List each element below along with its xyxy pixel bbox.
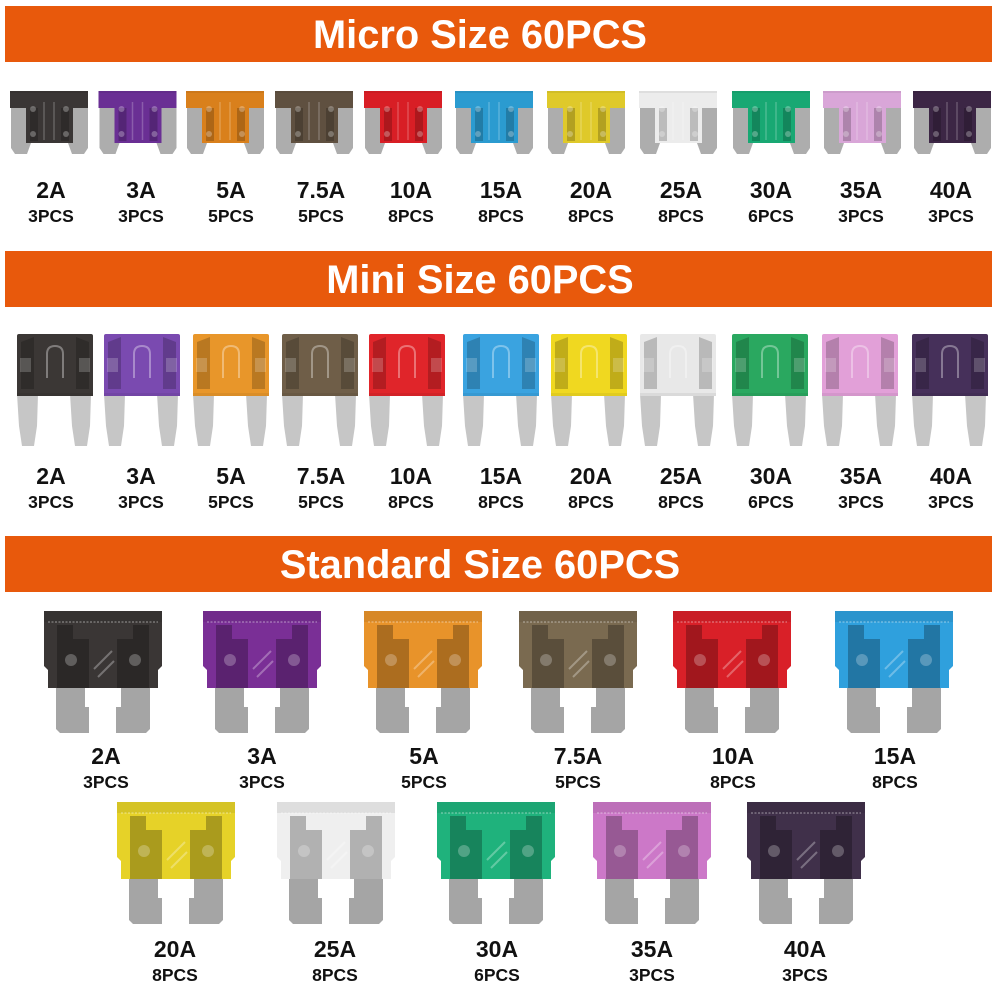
- standard fuse 10A: 10A: [712, 743, 754, 769]
- micro fuse 10A: [364, 91, 442, 226]
- mini fuse 35A: [822, 334, 898, 512]
- mini fuse 30A: [732, 334, 808, 512]
- mini fuse 25A: [640, 334, 716, 512]
- mini fuse 2A: 2A: [36, 463, 66, 489]
- standard fuse 30A: 30A: [476, 936, 518, 962]
- mini fuse 7.5A: 5PCS: [298, 492, 344, 512]
- banner: micro size: [5, 6, 992, 62]
- standard fuse 10A: 8PCS: [710, 772, 756, 792]
- micro fuse 10A: 10A: [390, 177, 432, 203]
- micro fuse 35A: [823, 91, 901, 226]
- mini fuse 20A: [551, 334, 627, 512]
- micro fuse 15A: 8PCS: [478, 206, 524, 226]
- banner: mini size: [5, 251, 992, 307]
- standard fuse 35A: 3PCS: [629, 965, 675, 985]
- mini fuse 15A: 8PCS: [478, 492, 524, 512]
- mini fuse 10A: 8PCS: [388, 492, 434, 512]
- micro fuse 20A: [547, 91, 625, 226]
- micro fuse 40A: 40A: [930, 177, 972, 203]
- micro fuse 15A: [455, 91, 533, 226]
- standard fuse 30A: 6PCS: [474, 965, 520, 985]
- standard fuse 40A: [747, 802, 865, 985]
- standard fuse 15A: 15A: [874, 743, 916, 769]
- standard fuse 2A: 2A: [91, 743, 121, 769]
- mini fuse 35A: 35A: [840, 463, 882, 489]
- mini fuse 3A: [104, 334, 180, 512]
- micro fuse 7.5A: [275, 91, 353, 226]
- micro fuse 3A: 3A: [126, 177, 156, 203]
- mini fuse 30A: 30A: [750, 463, 792, 489]
- mini fuse 3A: 3A: [126, 463, 156, 489]
- standard fuse 25A: 8PCS: [312, 965, 358, 985]
- banner: micro size: Micro Size 60PCS: [313, 13, 647, 57]
- micro fuse 35A: 3PCS: [838, 206, 884, 226]
- micro fuse 5A: [186, 91, 264, 226]
- micro fuse 2A: [10, 91, 88, 226]
- mini fuse 25A: 8PCS: [658, 492, 704, 512]
- standard fuse 5A: [364, 611, 482, 792]
- standard fuse 5A: 5A: [409, 743, 439, 769]
- mini fuse 2A: [17, 334, 93, 512]
- standard fuse 7.5A: [519, 611, 637, 792]
- mini fuse 20A: 8PCS: [568, 492, 614, 512]
- standard fuse 20A: 8PCS: [152, 965, 198, 985]
- standard fuse 3A: 3PCS: [239, 772, 285, 792]
- standard fuse 10A: [673, 611, 791, 792]
- standard fuse 40A: 40A: [784, 936, 826, 962]
- micro fuse 5A: 5PCS: [208, 206, 254, 226]
- standard fuse 5A: 5PCS: [401, 772, 447, 792]
- banner: standard size: [5, 536, 992, 592]
- mini fuse 7.5A: [282, 334, 358, 512]
- micro fuse 30A: 30A: [750, 177, 792, 203]
- standard fuse 40A: 3PCS: [782, 965, 828, 985]
- mini fuse 5A: 5PCS: [208, 492, 254, 512]
- mini fuse 10A: 10A: [390, 463, 432, 489]
- standard fuse 7.5A: 5PCS: [555, 772, 601, 792]
- mini fuse 10A: [369, 334, 445, 512]
- micro fuse 25A: 8PCS: [658, 206, 704, 226]
- standard fuse 7.5A: 7.5A: [554, 743, 602, 769]
- standard fuse 15A: [835, 611, 953, 792]
- mini fuse 40A: [912, 334, 988, 512]
- standard fuse 20A: 20A: [154, 936, 196, 962]
- mini fuse 40A: 40A: [930, 463, 972, 489]
- standard fuse 30A: [437, 802, 555, 985]
- mini fuse 3A: 3PCS: [118, 492, 164, 512]
- micro fuse 35A: 35A: [840, 177, 882, 203]
- standard fuse 15A: 8PCS: [872, 772, 918, 792]
- micro fuse 15A: 15A: [480, 177, 522, 203]
- micro fuse 3A: 3PCS: [118, 206, 164, 226]
- standard fuse 20A: [117, 802, 235, 985]
- micro fuse 25A: 25A: [660, 177, 702, 203]
- mini fuse 5A: 5A: [216, 463, 246, 489]
- micro fuse 40A: 3PCS: [928, 206, 974, 226]
- micro fuse 30A: 6PCS: [748, 206, 794, 226]
- micro fuse 3A: [98, 91, 176, 226]
- mini fuse 2A: 3PCS: [28, 492, 74, 512]
- standard fuse 25A: [277, 802, 395, 985]
- micro fuse 40A: [913, 91, 991, 226]
- micro fuse 7.5A: 7.5A: [297, 177, 345, 203]
- micro fuse 10A: 8PCS: [388, 206, 434, 226]
- mini fuse 15A: [463, 334, 539, 512]
- micro fuse 2A: 2A: [36, 177, 66, 203]
- micro fuse 20A: 20A: [570, 177, 612, 203]
- micro fuse 5A: 5A: [216, 177, 246, 203]
- micro fuse 7.5A: 5PCS: [298, 206, 344, 226]
- standard fuse 3A: 3A: [247, 743, 277, 769]
- banner: mini size: Mini Size 60PCS: [326, 258, 634, 302]
- standard fuse 35A: 35A: [631, 936, 673, 962]
- mini fuse 15A: 15A: [480, 463, 522, 489]
- mini fuse 40A: 3PCS: [928, 492, 974, 512]
- standard fuse 2A: 3PCS: [83, 772, 129, 792]
- standard fuse 2A: [44, 611, 162, 792]
- standard fuse 35A: [593, 802, 711, 985]
- mini fuse 7.5A: 7.5A: [297, 463, 345, 489]
- mini fuse 5A: [193, 334, 269, 512]
- micro fuse 2A: 3PCS: [28, 206, 74, 226]
- micro fuse 20A: 8PCS: [568, 206, 614, 226]
- mini fuse 35A: 3PCS: [838, 492, 884, 512]
- mini fuse 20A: 20A: [570, 463, 612, 489]
- standard fuse 3A: [203, 611, 321, 792]
- banner: standard size: Standard Size 60PCS: [280, 543, 680, 587]
- standard fuse 25A: 25A: [314, 936, 356, 962]
- mini fuse 30A: 6PCS: [748, 492, 794, 512]
- micro fuse 25A: [639, 91, 717, 226]
- mini fuse 25A: 25A: [660, 463, 702, 489]
- micro fuse 30A: [732, 91, 810, 226]
